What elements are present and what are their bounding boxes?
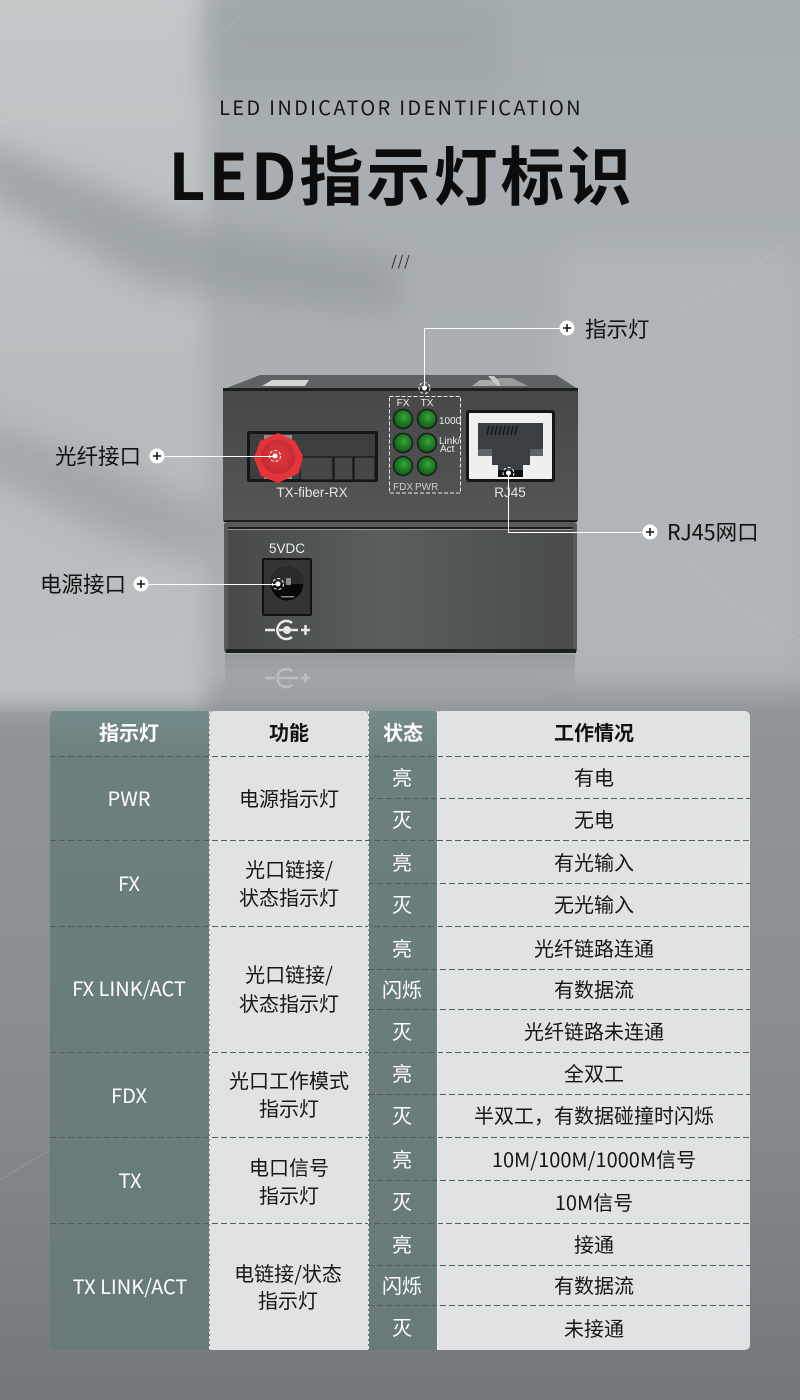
column: indicator names: FX (118, 868, 141, 897)
fiber port (247, 431, 378, 500)
column: states: 亮 (392, 847, 412, 876)
column: functions: 状态指示灯 (239, 882, 339, 911)
dashed column lines (210, 711, 438, 1350)
5VDC label: 5VDC (269, 541, 305, 556)
title: LED指示灯标识 (168, 127, 635, 219)
callout: 光纤接口: 光纤接口 (55, 440, 141, 471)
column: functions: 电源指示灯 (239, 783, 339, 812)
column: states: 亮 (392, 1229, 412, 1258)
power jack (262, 558, 312, 616)
callout: 指示灯: 指示灯 (585, 313, 650, 344)
column: indicator names: TX LINK/ACT (73, 1271, 187, 1300)
column: functions (229, 783, 349, 1314)
callout: 指示灯 (419, 313, 650, 394)
callout: RJ45网口 (503, 468, 759, 547)
column: states: 亮 (392, 1144, 412, 1173)
column: working conditions: 全双工 (564, 1058, 624, 1087)
column: states (382, 762, 422, 1341)
subtitle: English heading: LED INDICATOR IDENTIFICATION (219, 92, 583, 121)
LED indicator block: FDX (393, 482, 413, 493)
table header: 工作情况 (554, 717, 634, 746)
fiber port: TX-fiber-RX (276, 485, 348, 500)
table: LED status (50, 711, 750, 1350)
callout: 电源接口 (40, 568, 284, 599)
device: upper unit front panel (223, 375, 578, 522)
column: working conditions: 半双工，有数据碰撞时闪烁 (474, 1100, 714, 1129)
LED indicator block: Act (440, 444, 455, 455)
LED indicator block (390, 396, 462, 493)
LED indicator block: 1000 (439, 416, 462, 427)
device: lower unit front panel (224, 520, 577, 653)
table header: 指示灯 (99, 717, 159, 746)
column: functions: 指示灯 (258, 1285, 318, 1314)
callout: 电源接口: 电源接口 (40, 568, 126, 599)
column: indicator names: FDX (111, 1080, 147, 1109)
column: indicator names: TX (118, 1165, 142, 1194)
column: working conditions: 光纤链路连通 (534, 933, 654, 962)
column: working conditions: 光纤链路未连通 (524, 1016, 664, 1045)
column: states: 亮 (392, 933, 412, 962)
column backgrounds (50, 711, 750, 1350)
dashed row lines (50, 756, 750, 1306)
column: states: 灭 (392, 1100, 412, 1129)
column: states: 灭 (392, 1016, 412, 1045)
column: functions: 指示灯 (259, 1093, 319, 1122)
LED indicator block: TX (421, 398, 434, 409)
column: functions: 光口链接/ (245, 854, 333, 883)
LED indicator block: PWR (415, 482, 438, 493)
table header (99, 717, 634, 746)
RJ45 port: RJ45 (494, 485, 526, 500)
column: states: 灭 (392, 1186, 412, 1215)
column: states: 亮 (392, 762, 412, 791)
column: working conditions: 10M/100M/1000M信号 (492, 1144, 696, 1173)
column: working conditions: 接通 (574, 1229, 614, 1258)
column: functions: 光口工作模式 (229, 1065, 349, 1094)
LED indicator block: Link/ (439, 436, 460, 447)
column: functions: 光口链接/ (245, 959, 333, 988)
column: working conditions: 有光输入 (554, 847, 634, 876)
polarity symbol (265, 621, 310, 639)
table header: 功能 (269, 717, 309, 746)
column: states: 闪烁 (382, 974, 422, 1003)
column: states: 亮 (392, 1058, 412, 1087)
column: working conditions: 有数据流 (554, 974, 634, 1003)
column: working conditions: 无光输入 (554, 889, 634, 918)
column: states: 灭 (392, 804, 412, 833)
column: states: 灭 (392, 1312, 412, 1341)
decorative slashes: /// (391, 251, 411, 271)
column: states: 灭 (392, 889, 412, 918)
column: working conditions: 有电 (574, 762, 614, 791)
column: indicator names: FX LINK/ACT (72, 973, 186, 1002)
LED indicator block: FX (397, 398, 410, 409)
column: indicator names: PWR (108, 783, 151, 812)
column: functions: 电链接/状态 (234, 1258, 342, 1287)
device: lower unit reflection (225, 654, 575, 704)
callout: 光纤接口 (55, 440, 280, 471)
callout: RJ45网口: RJ45网口 (667, 516, 759, 547)
column: functions: 指示灯 (259, 1180, 319, 1209)
column: working conditions: 无电 (574, 804, 614, 833)
column: functions: 状态指示灯 (239, 988, 339, 1017)
column: working conditions: 未接通 (564, 1313, 624, 1342)
table header: 状态 (383, 717, 423, 746)
column: working conditions: 10M信号 (555, 1187, 633, 1216)
column: states: 闪烁 (382, 1270, 422, 1299)
column: functions: 电口信号 (249, 1152, 329, 1181)
RJ45 port (466, 410, 555, 500)
column: working conditions (474, 762, 714, 1342)
column: working conditions: 有数据流 (554, 1270, 634, 1299)
column: indicator names (72, 783, 187, 1300)
